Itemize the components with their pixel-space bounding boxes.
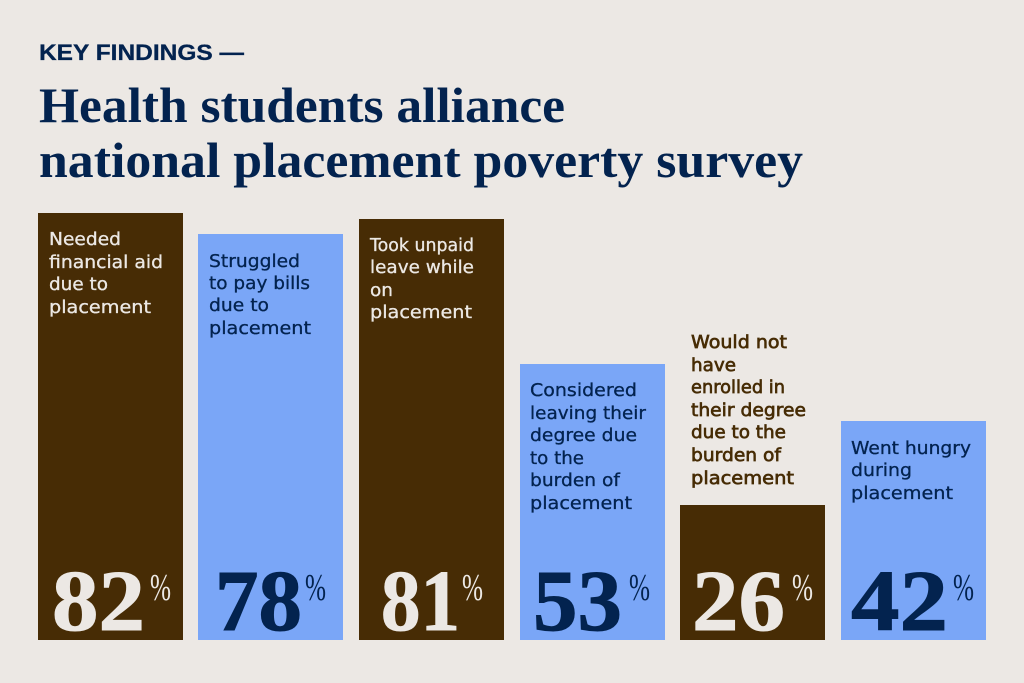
bar: took unpaid leave 81%: Took unpaid (369, 236, 474, 256)
bar: went hungry 42% (841, 421, 986, 649)
bar: struggled to pay bills 78% (198, 234, 343, 649)
bar: considered leaving degree 53%: burden of (530, 471, 621, 491)
bar: needed financial aid 82%: % (150, 567, 171, 609)
bar: considered leaving degree 53%: % (629, 567, 650, 609)
bar: would not have enrolled 26% (680, 333, 825, 649)
bar: would not have enrolled 26%: enrolled in (691, 378, 785, 398)
title: Health students alliance (39, 77, 565, 133)
bar: struggled to pay bills 78%: Struggled (209, 252, 300, 272)
bar: needed financial aid 82%: Needed (49, 230, 121, 250)
bar: struggled to pay bills 78%: due to (209, 296, 269, 316)
bar: would not have enrolled 26%: 26 (692, 552, 785, 649)
bar: would not have enrolled 26%: burden of (691, 446, 782, 466)
bar: took unpaid leave 81%: 81 (381, 552, 460, 649)
title (39, 77, 803, 188)
bar: would not have enrolled 26%: their degree (691, 401, 806, 421)
bar: took unpaid leave 81%: leave while (370, 258, 474, 278)
bar: considered leaving degree 53%: to the (530, 449, 584, 469)
bar: would not have enrolled 26%: % (792, 567, 813, 609)
bar: considered leaving degree 53% (520, 364, 665, 649)
bar: needed financial aid 82%: 82 (52, 552, 145, 649)
bar: would not have enrolled 26%: have (691, 356, 736, 376)
bar: took unpaid leave 81%: % (462, 567, 483, 609)
bar: considered leaving degree 53%: placement (530, 494, 632, 514)
bar: went hungry 42%: placement (851, 484, 953, 504)
bar: took unpaid leave 81%: placement (370, 303, 472, 323)
bar: took unpaid leave 81% (359, 219, 504, 649)
bar: needed financial aid 82%: financial aid (49, 253, 163, 273)
bar: struggled to pay bills 78%: to pay bills (209, 274, 310, 294)
bar: considered leaving degree 53%: degree due (530, 426, 637, 446)
bar: considered leaving degree 53%: leaving their (530, 404, 647, 424)
bar: went hungry 42%: 42 (851, 552, 948, 649)
title: national placement poverty survey (39, 132, 803, 188)
bar: needed financial aid 82%: due to (49, 275, 108, 295)
bar: considered leaving degree 53%: 53 (533, 552, 622, 649)
bar: took unpaid leave 81%: on (370, 281, 393, 301)
bar: went hungry 42%: % (953, 567, 974, 609)
bar: would not have enrolled 26%: placement (691, 469, 794, 489)
bar: considered leaving degree 53%: Considered (530, 381, 637, 401)
bar: struggled to pay bills 78%: % (305, 567, 326, 609)
bar: would not have enrolled 26%: due to the (691, 423, 786, 443)
bar: went hungry 42%: Went hungry (851, 439, 971, 459)
eyebrow: key findings: KEY FINDINGS — (39, 40, 245, 65)
bar: went hungry 42%: during (851, 461, 912, 481)
bar: needed financial aid 82% (38, 213, 183, 649)
bar: struggled to pay bills 78%: 78 (215, 552, 302, 649)
bar: would not have enrolled 26%: Would not (691, 333, 787, 353)
bar: struggled to pay bills 78%: placement (209, 319, 311, 339)
bar: needed financial aid 82%: placement (49, 298, 151, 318)
